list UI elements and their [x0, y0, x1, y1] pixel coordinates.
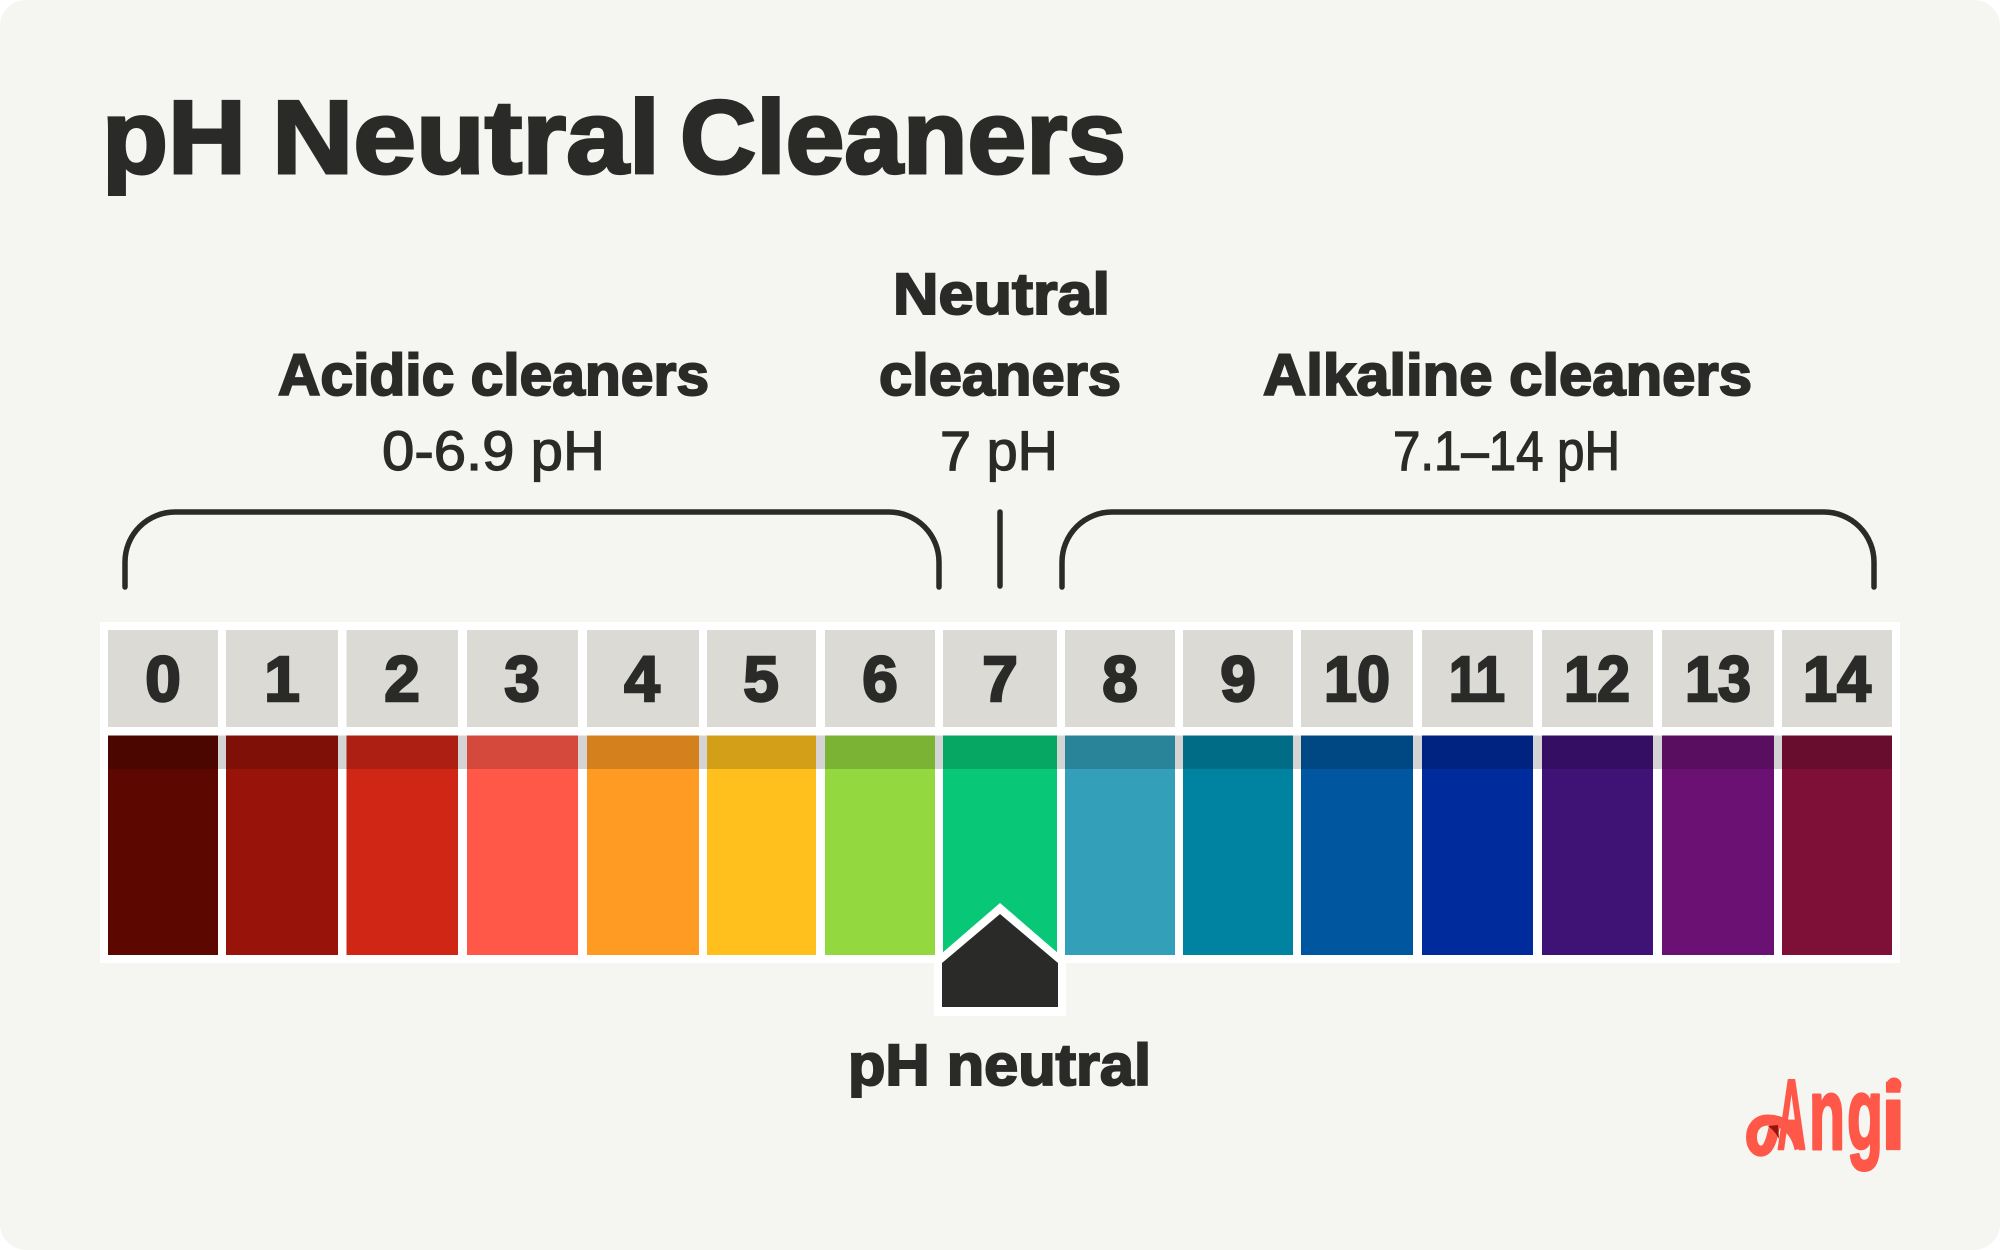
number cells — [108, 630, 1892, 727]
scale numbers: 8 — [1102, 643, 1138, 715]
label: alkaline cleaners — [1263, 343, 1752, 482]
label: acidic cleaners: 0-6.9 pH — [382, 419, 605, 482]
neutral marker — [934, 903, 1066, 1016]
bracket: neutral tick — [997, 512, 1003, 586]
pH scale — [100, 622, 1900, 963]
scale numbers: 13 — [1685, 643, 1751, 715]
label: neutral cleaners: 7 pH — [940, 419, 1058, 482]
scale numbers: 6 — [862, 643, 898, 715]
label: alkaline cleaners: Alkaline cleaners — [1263, 343, 1752, 408]
title — [102, 80, 1126, 196]
label: neutral cleaners: Neutral — [893, 262, 1110, 327]
scale numbers: 11 — [1449, 643, 1505, 715]
shadow band — [108, 736, 1892, 769]
scale numbers: 0 — [145, 643, 181, 715]
logo: Angi — [1752, 1057, 1906, 1171]
label: alkaline cleaners: 7.1–14 pH — [1393, 419, 1620, 482]
scale numbers: 9 — [1220, 643, 1256, 715]
scale numbers: 1 — [264, 643, 300, 715]
label: acidic cleaners: Acidic cleaners — [278, 343, 709, 408]
colour bars — [108, 736, 1892, 955]
logo: Angi: i — [1880, 1067, 1906, 1169]
title: pH — [102, 80, 246, 196]
logo: Angi: A — [1777, 1059, 1806, 1171]
scale numbers — [145, 643, 1871, 715]
logo: Angi: g — [1847, 1057, 1883, 1171]
title: Cleaners — [680, 80, 1126, 196]
label: acidic cleaners — [278, 343, 709, 482]
logo: Angi: n — [1809, 1057, 1845, 1171]
label: neutral cleaners — [879, 262, 1121, 482]
scale numbers: 14 — [1803, 643, 1871, 715]
scale backing — [100, 622, 1900, 963]
scale numbers: 7 — [982, 643, 1018, 715]
scale numbers: 3 — [504, 643, 540, 715]
bracket: acidic range — [125, 512, 939, 587]
label: neutral cleaners: cleaners — [879, 343, 1121, 408]
scale numbers: 2 — [384, 643, 420, 715]
scale numbers: 4 — [624, 643, 660, 715]
bracket: alkaline range — [1062, 512, 1874, 587]
scale numbers: 5 — [743, 643, 779, 715]
label: pH neutral: pH neutral — [848, 1033, 1151, 1098]
scale numbers: 12 — [1564, 643, 1630, 715]
scale numbers: 10 — [1324, 643, 1390, 715]
title: Neutral — [272, 80, 660, 196]
